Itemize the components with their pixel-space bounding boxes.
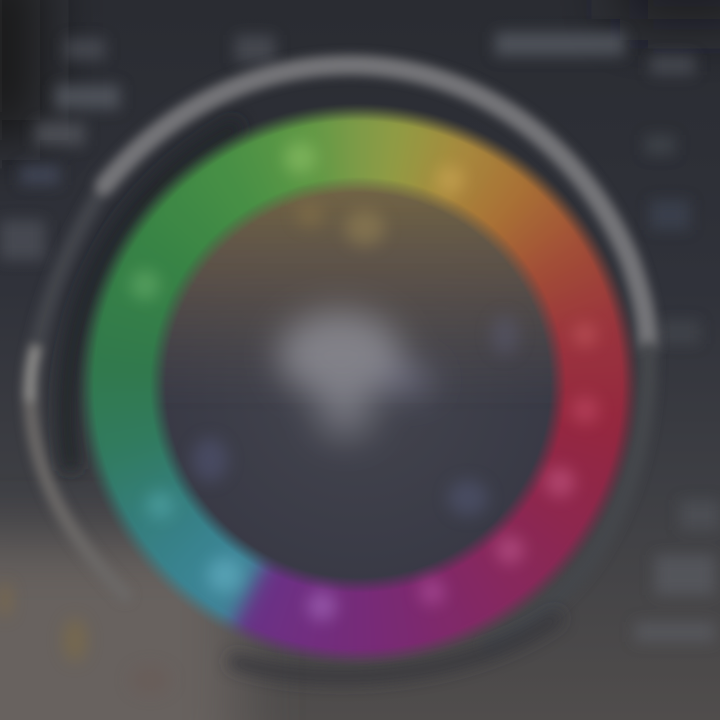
foreground speckles (0, 582, 170, 694)
faint marks in dial (192, 203, 519, 516)
inner dark shadow of the ring (67, 125, 560, 676)
colour wheel ring (76, 103, 640, 667)
centre glow (278, 311, 433, 439)
ring highlights (130, 142, 599, 621)
